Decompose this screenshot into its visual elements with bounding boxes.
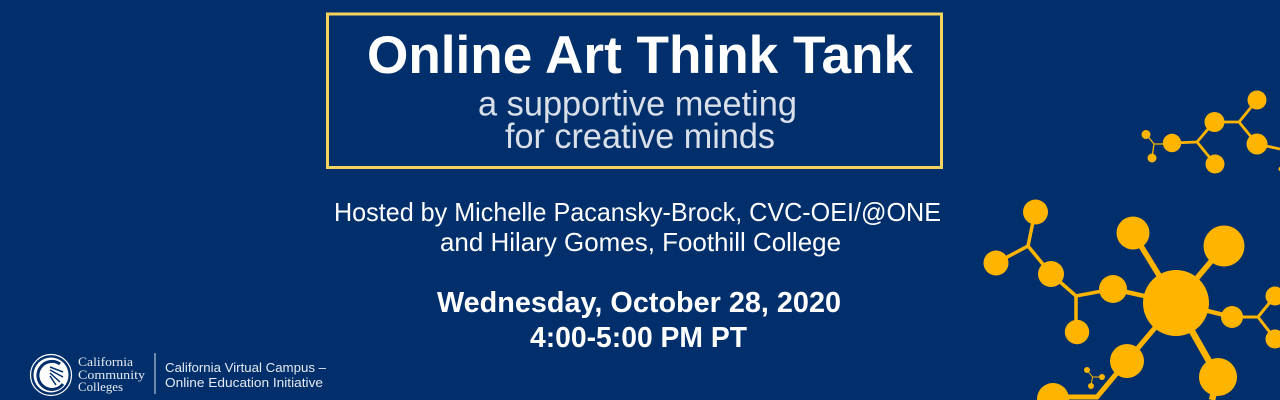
wordmark: Community (78, 367, 146, 382)
CVC-OEI text: Online Education Initiative (165, 375, 323, 390)
logo: California Community Colleges (30, 353, 327, 396)
icon: large molecule (984, 200, 1280, 400)
CVC-OEI text: California Virtual Campus – (165, 360, 327, 375)
icon: small molecule (1142, 90, 1280, 174)
hosts: and Hilary Gomes, Foothill College (440, 227, 841, 257)
title: Online Art Think Tank (367, 26, 914, 85)
CVC-OEI text (165, 360, 327, 390)
wordmark: California (78, 354, 133, 369)
wordmark: Colleges (78, 379, 123, 394)
date and time: Wednesday, October 28, 2020 (437, 287, 841, 319)
hosts: Hosted by Michelle Pacansky-Brock, CVC-OEI/@ONE (334, 197, 941, 227)
icon: college seal (30, 354, 72, 396)
subtitle (478, 84, 797, 156)
date and time (437, 287, 841, 354)
date and time: 4:00-5:00 PM PT (530, 322, 747, 354)
title box (328, 14, 942, 168)
hosts (334, 197, 941, 257)
wordmark (78, 354, 146, 394)
subtitle: for creative minds (505, 117, 775, 156)
subtitle: a supportive meeting (478, 84, 797, 124)
